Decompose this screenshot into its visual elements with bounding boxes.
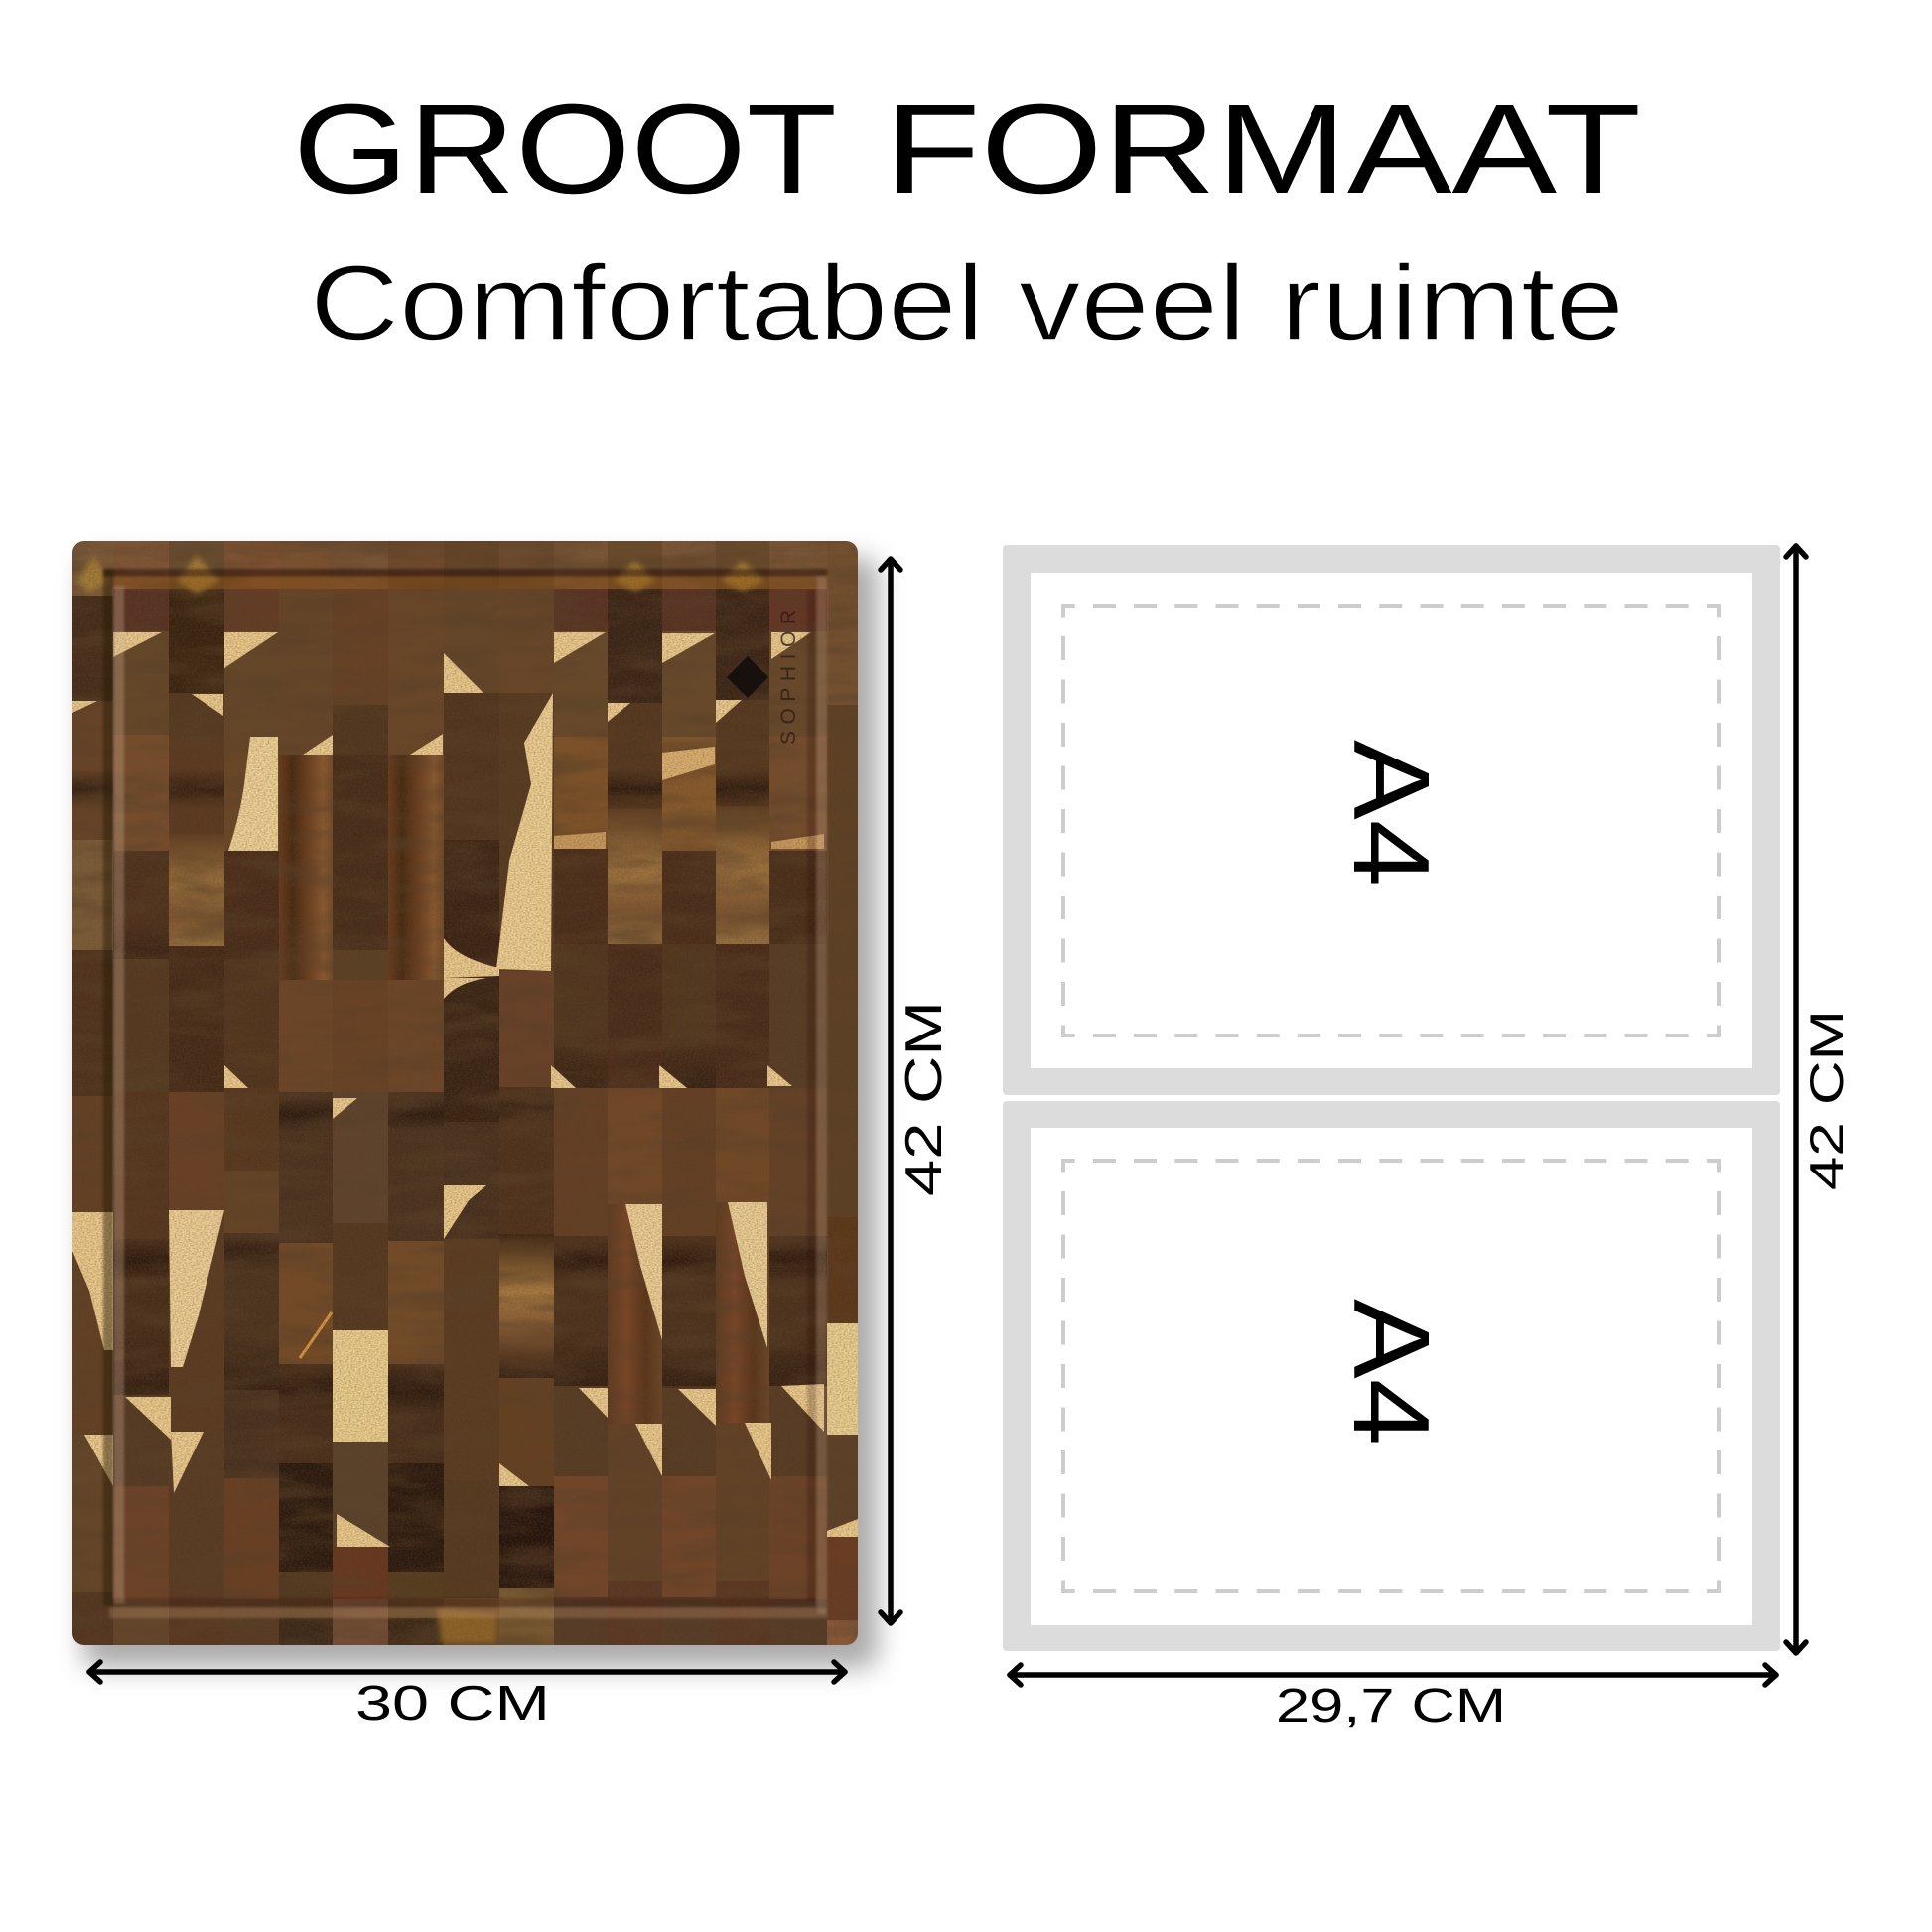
label: A4 height: 42 CM	[1800, 1010, 1853, 1190]
board block column 3	[224, 541, 279, 1645]
arrow: board width	[89, 1662, 845, 1682]
label: board width: 30 CM	[355, 1677, 550, 1730]
board block column 8	[499, 541, 554, 1645]
title: GROOT	[293, 78, 837, 220]
board block column 14	[827, 541, 858, 1645]
board block column 9	[554, 541, 608, 1645]
board block column 0	[72, 541, 113, 1645]
board block column 2	[169, 541, 224, 1645]
arrow: A4 width	[1010, 1665, 1776, 1685]
board block column 10	[608, 541, 662, 1645]
board block column 13	[769, 541, 827, 1645]
label A4 bottom: A4	[1330, 1299, 1451, 1446]
dashed outline top	[1061, 604, 1721, 1037]
board grain bands	[72, 769, 827, 1415]
board gold knots	[77, 556, 764, 1643]
dashed outline bottom	[1061, 1159, 1721, 1593]
board brand text: SOPHIOR	[777, 610, 800, 745]
board thin orange crack	[300, 1312, 332, 1358]
board block column 7	[444, 541, 499, 1645]
board block column 12	[716, 541, 769, 1645]
board pale sapwood patches	[72, 632, 858, 1547]
board shadow	[83, 558, 878, 1668]
wood texture	[72, 541, 858, 1645]
board logo diamond	[727, 656, 768, 698]
label A4 top: A4	[1330, 740, 1451, 887]
panel: A4 sheet top	[1003, 545, 1780, 1095]
label: A4 width: 29,7 CM	[1276, 1680, 1506, 1732]
board block column 6	[388, 541, 444, 1645]
panel: A4 sheet bottom	[1003, 1101, 1780, 1651]
juice groove	[103, 569, 827, 1618]
subtitle: Comfortabel veel ruimte	[310, 242, 1624, 362]
board block column 5	[333, 541, 388, 1645]
wood cutting board	[72, 541, 858, 1645]
arrow: board height	[881, 559, 900, 1623]
title	[293, 78, 1641, 220]
wood mottling	[72, 541, 858, 1645]
board block column 1	[113, 541, 169, 1645]
title: FORMAAT	[885, 78, 1641, 220]
board block column 11	[662, 541, 716, 1645]
board block column 4	[279, 541, 333, 1645]
label: board height: 42 CM	[896, 1001, 953, 1196]
arrow: A4 height	[1786, 546, 1806, 1653]
